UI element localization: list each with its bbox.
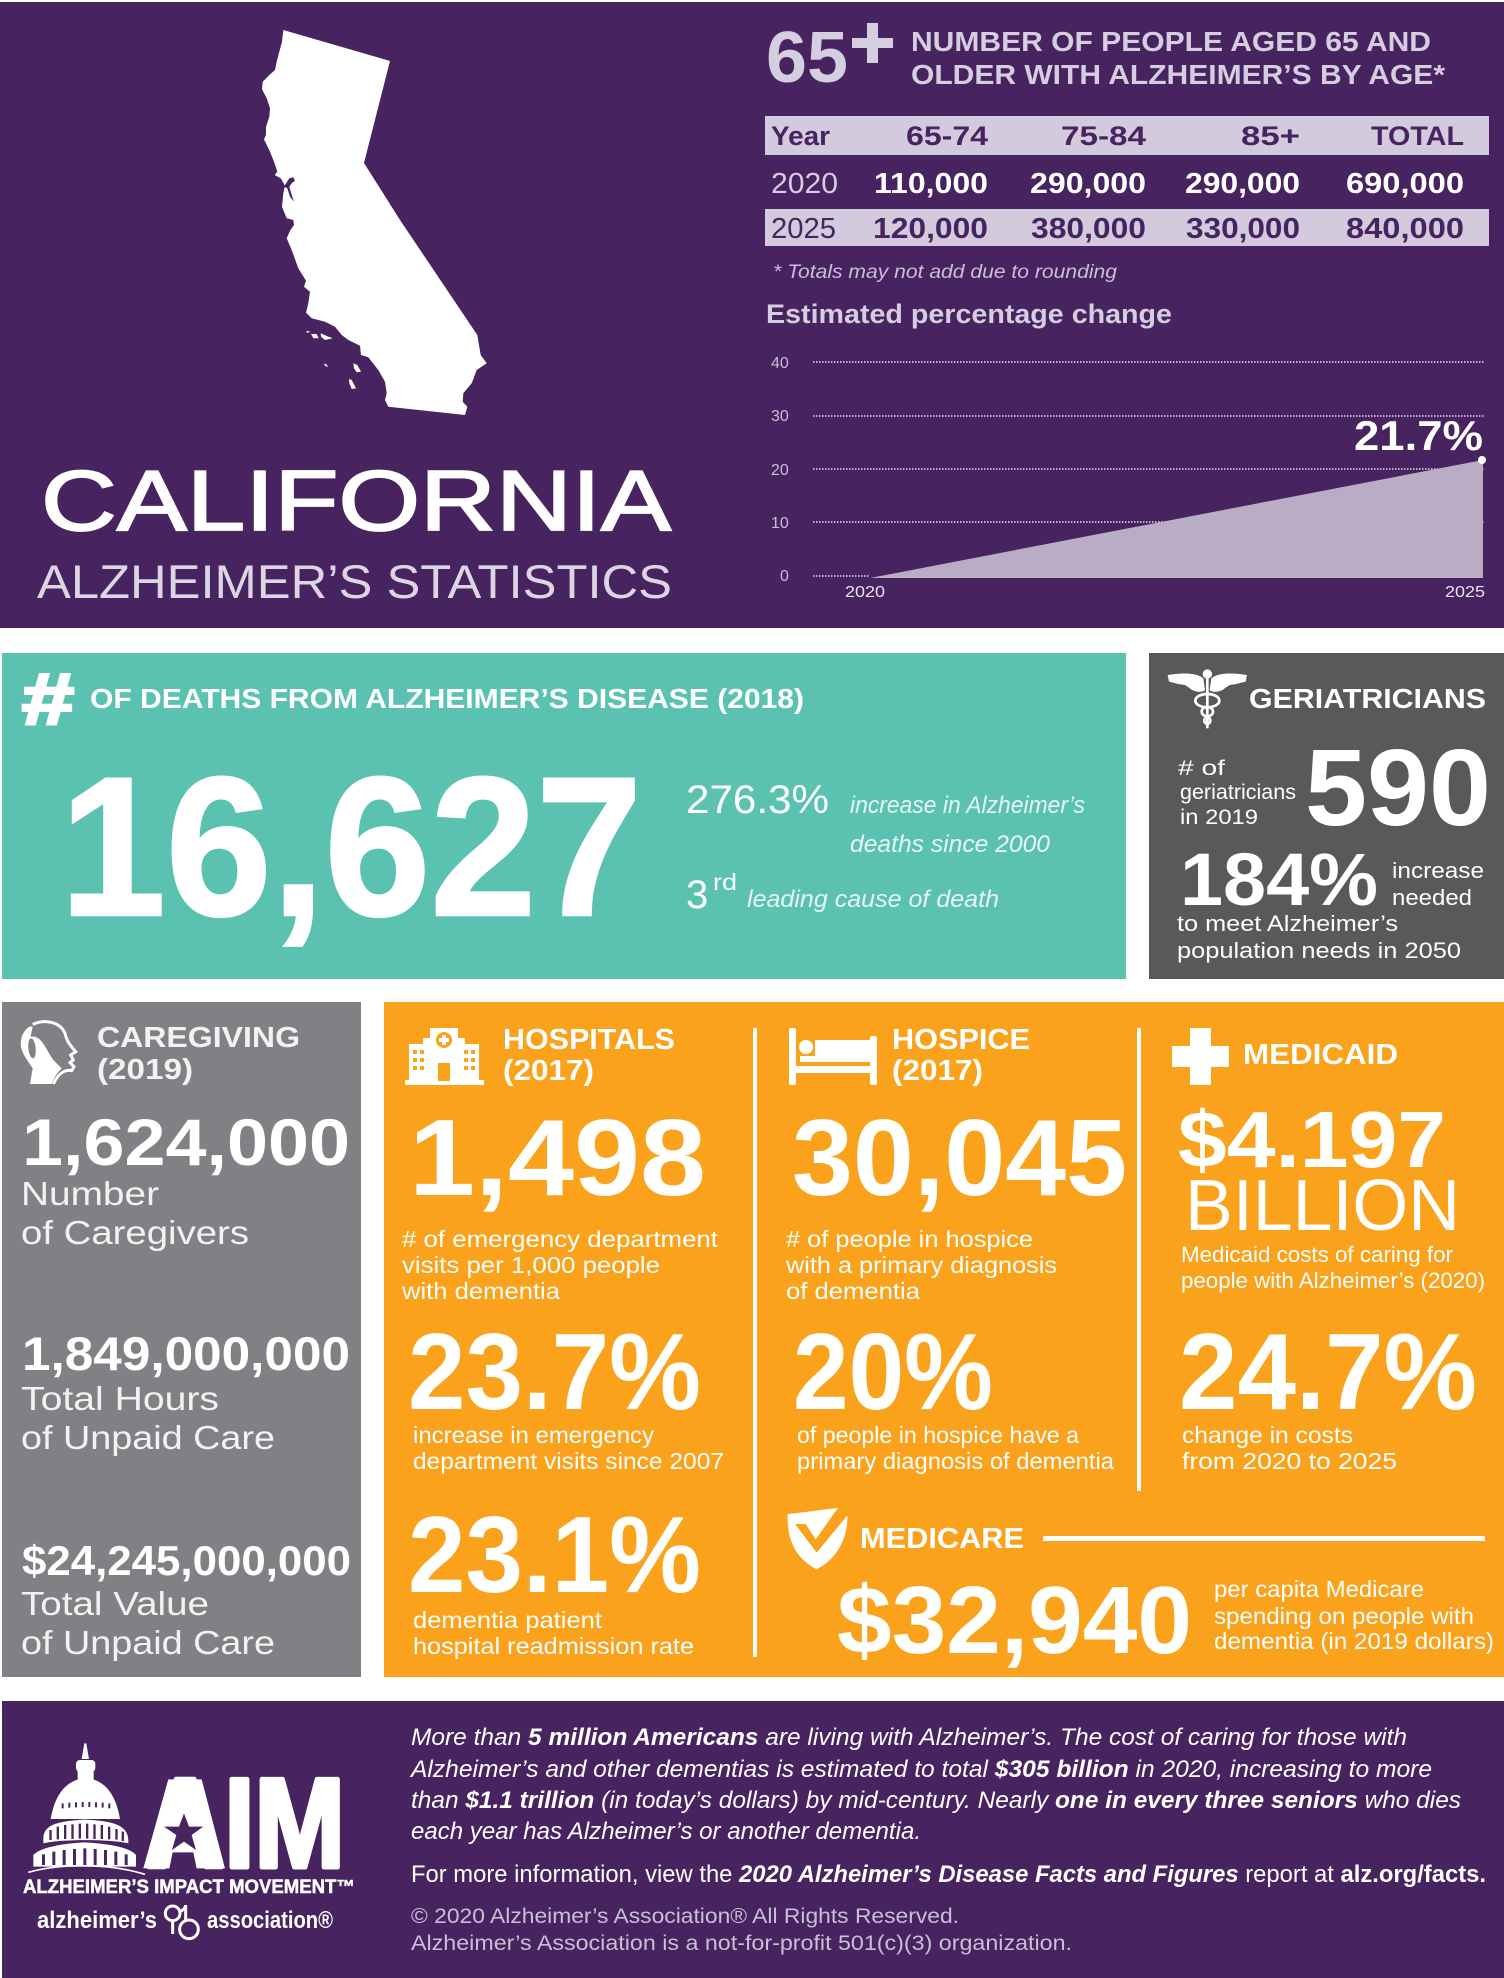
stat: per capita medicare spending xyxy=(837,1567,1494,1674)
area chart: estimated percentage change xyxy=(771,355,1486,601)
table: people with Alzheimer's by age: TOTAL xyxy=(1371,121,1464,151)
heading: number of deaths: OF DEATHS FROM ALZHEIMER’S DISEASE (2018) xyxy=(90,683,804,714)
heading: hospitals 2017: (2017) xyxy=(503,1055,594,1087)
stat: 184% increase needed: population needs in 2050 xyxy=(1177,938,1461,963)
stat: change in costs: change in costs xyxy=(1182,1422,1353,1448)
heading: hospitals 2017: HOSPITALS xyxy=(503,1024,675,1056)
stat: change in costs: 24.7% xyxy=(1179,1311,1477,1433)
heading: medicaid: MEDICAID xyxy=(1243,1039,1398,1071)
stat: readmission rate: 23.1% xyxy=(408,1494,701,1616)
stat: third leading cause xyxy=(686,869,999,917)
table: people with Alzheimer's by age: 2020 xyxy=(771,168,838,200)
stat: per capita medicare spending: per capita Medicare xyxy=(1214,1576,1424,1602)
stat: third leading cause: rd xyxy=(713,869,737,895)
stat: 184% increase needed: needed xyxy=(1392,885,1472,910)
area chart: estimated percentage change: 30 xyxy=(771,408,789,425)
heading: number of people aged 65 and older: OLDER WITH ALZHEIMER’S BY AGE* xyxy=(911,59,1445,90)
table: people with Alzheimer's by age: 120,000 xyxy=(873,213,988,245)
stat: number of caregivers: 1,624,000 xyxy=(22,1105,350,1179)
area chart: estimated percentage change: 2020 xyxy=(845,584,885,601)
table: people with Alzheimer's by age: 2025 xyxy=(771,213,836,245)
heading: hospice 2017: (2017) xyxy=(892,1055,983,1087)
stat: 276.3% increase xyxy=(686,778,1085,858)
icon: medical cross xyxy=(1172,1028,1229,1085)
text block: copyright: © 2020 Alzheimer’s Association® All Rights Reserved. xyxy=(411,1905,959,1928)
table: people with Alzheimer's by age xyxy=(765,116,1489,246)
text block: overview xyxy=(409,1724,1461,1845)
section: hospice xyxy=(785,1024,1127,1474)
table: people with Alzheimer's by age: 330,000 xyxy=(1186,213,1300,245)
label: number of geriatricians in 2019: geriatricians xyxy=(1180,781,1296,804)
icon: head and hand xyxy=(21,1022,76,1084)
table: people with Alzheimer's by age: 65-74 xyxy=(906,121,988,151)
icon: capitol dome xyxy=(28,1743,145,1874)
table: people with Alzheimer's by age: 110,000 xyxy=(874,168,988,200)
stat: medicaid costs: BILLION xyxy=(1185,1166,1460,1246)
area chart: estimated percentage change: 21.7% xyxy=(1354,412,1483,459)
stat: emergency department visits xyxy=(401,1097,719,1304)
label: number of geriatricians in 2019: # of xyxy=(1178,757,1225,780)
stat: third leading cause: leading cause of death xyxy=(747,886,999,913)
stat: people in hospice xyxy=(785,1097,1127,1304)
heading: hospice 2017: HOSPICE xyxy=(892,1024,1030,1056)
stat: total value of unpaid care: Total Value xyxy=(21,1585,209,1622)
stat: emergency department visits: with dementia xyxy=(401,1278,560,1304)
stat: total hours of unpaid care: 1,849,000,000 xyxy=(22,1327,350,1380)
text block: overview: each year has Alzheimer’s or another dementia. xyxy=(411,1818,921,1845)
text block: overview: than $1.1 trillion (in today’s dollars) by mid-century. Nearly one in every three seniors who dies xyxy=(411,1787,1461,1814)
table: people with Alzheimer's by age: 290,000 xyxy=(1030,168,1146,200)
big number: 590: 590 xyxy=(1305,727,1491,849)
table: people with Alzheimer's by age: Year xyxy=(771,121,831,151)
stat: 20% in hospice xyxy=(793,1311,1114,1474)
stat: 20% in hospice: 20% xyxy=(793,1311,993,1433)
text block: overview: Alzheimer’s and other dementias is estimated to total $305 billion in 2020, increasing to more xyxy=(409,1756,1432,1783)
stat: per capita medicare spending: $32,940 xyxy=(837,1567,1192,1674)
stat: 184% increase needed: to meet Alzheimer’s xyxy=(1177,911,1398,936)
stat: number of caregivers xyxy=(21,1105,350,1251)
stat: total hours of unpaid care xyxy=(21,1327,350,1456)
stat: medicaid costs: $4.197 xyxy=(1178,1095,1446,1184)
stat: total hours of unpaid care: Total Hours xyxy=(21,1380,219,1417)
stat: increase in ED visits: 23.7% xyxy=(408,1311,701,1433)
panel: geriatricians xyxy=(1149,653,1504,979)
footnote: totals rounding: * Totals may not add due to rounding xyxy=(773,262,1117,283)
stat: increase in ED visits: increase in emergency xyxy=(413,1422,655,1448)
stat: change in costs: from 2020 to 2025 xyxy=(1182,1448,1397,1474)
panel: deaths from Alzheimer's disease xyxy=(2,653,1126,979)
panel: caregiving xyxy=(2,1002,361,1677)
stat: emergency department visits: visits per 1,000 people xyxy=(402,1252,660,1278)
stat: people in hospice: 30,045 xyxy=(792,1097,1127,1219)
stat: 20% in hospice: of people in hospice have a xyxy=(797,1422,1079,1448)
table: people with Alzheimer's by age: 75-84 xyxy=(1061,121,1146,151)
stat: 276.3% increase: 276.3% xyxy=(686,778,829,822)
big number: deaths: 16,627 xyxy=(60,736,642,957)
icon: caduceus xyxy=(1168,669,1247,728)
heading: caregiving 2019 xyxy=(97,1022,300,1086)
label: number of geriatricians in 2019: in 2019 xyxy=(1180,806,1258,829)
area chart: estimated percentage change: 40 xyxy=(771,355,789,372)
label: number of geriatricians in 2019 xyxy=(1178,757,1296,829)
wordmark: Alzheimer's Association: alzheimer’s xyxy=(37,1907,157,1934)
stat: increase in ED visits: department visits since 2007 xyxy=(413,1448,724,1474)
stat: emergency department visits: 1,498 xyxy=(409,1097,706,1219)
stat: medicaid costs: Medicaid costs of caring for xyxy=(1181,1242,1453,1267)
stat: total value of unpaid care xyxy=(21,1537,351,1661)
stat: 184% increase needed: increase xyxy=(1392,858,1484,883)
section: medicare xyxy=(788,1507,1494,1674)
stat: 184% increase needed: 184% xyxy=(1180,838,1378,921)
stat: per capita medicare spending: spending on people with xyxy=(1214,1603,1474,1629)
heading: 65+ number xyxy=(766,18,893,98)
stat: third leading cause: 3 xyxy=(686,873,708,917)
wordmark: Alzheimer's Association: association® xyxy=(207,1907,333,1934)
heading: hospitals 2017 xyxy=(503,1024,675,1087)
title: California: CALIFORNIA xyxy=(41,454,671,549)
icon: bed xyxy=(789,1028,877,1085)
stat: total value of unpaid care: of Unpaid Care xyxy=(21,1624,275,1661)
stat: number of caregivers: Number xyxy=(21,1175,159,1212)
heading: estimated percentage change: Estimated percentage change xyxy=(766,299,1172,329)
stat: medicaid costs: people with Alzheimer’s (2020) xyxy=(1181,1268,1485,1293)
text block: copyright: Alzheimer’s Association is a not-for-profit 501(c)(3) organization. xyxy=(411,1932,1072,1955)
stat: readmission rate: dementia patient xyxy=(413,1607,603,1633)
panel: footer xyxy=(2,1701,1504,1978)
wordmark: AIM: AIM xyxy=(146,1752,345,1894)
table: people with Alzheimer's by age: 690,000 xyxy=(1346,168,1464,200)
stat: total hours of unpaid care: of Unpaid Care xyxy=(21,1419,275,1456)
text block: copyright xyxy=(411,1905,1072,1955)
panel: California header and title xyxy=(0,2,752,628)
wordmark: Alzheimer's Association xyxy=(37,1905,333,1939)
wordmark: Alzheimer's Impact Movement: ALZHEIMER’S IMPACT MOVEMENT™ xyxy=(23,1877,355,1898)
section: hospitals xyxy=(401,1024,724,1659)
table: people with Alzheimer's by age: 840,000 xyxy=(1346,213,1464,245)
heading: geriatricians: GERIATRICIANS xyxy=(1249,683,1486,714)
stat: people in hospice: with a primary diagnosis xyxy=(785,1252,1057,1278)
heading: 65+ number: 65 xyxy=(766,18,848,98)
logo: Alzheimer's Impact Movement xyxy=(23,1743,355,1939)
icon: hospital building xyxy=(405,1028,484,1085)
area chart: estimated percentage change: 0 xyxy=(780,568,789,585)
table: people with Alzheimer's by age: 380,000 xyxy=(1031,213,1146,245)
icon: California state map xyxy=(262,30,487,415)
area chart: estimated percentage change: 2025 xyxy=(1445,584,1485,601)
stat: 184% increase needed xyxy=(1177,838,1484,963)
heading: medicare: MEDICARE xyxy=(860,1523,1024,1555)
panel: age 65+ table and chart xyxy=(752,2,1504,628)
area chart: estimated percentage change: 10 xyxy=(771,515,789,532)
text block: more information: For more information, view the 2020 Alzheimer’s Disease Facts and Figures report at alz.org/facts. xyxy=(411,1861,1486,1888)
section: medicaid xyxy=(1172,1028,1485,1474)
stat: readmission rate: hospital readmission rate xyxy=(413,1633,694,1659)
heading: hospice 2017 xyxy=(892,1024,1030,1087)
table: people with Alzheimer's by age: 290,000 xyxy=(1185,168,1300,200)
stat: people in hospice: of dementia xyxy=(786,1278,920,1304)
icon: shield with check xyxy=(788,1507,848,1569)
stat: per capita medicare spending: dementia (in 2019 dollars) xyxy=(1214,1628,1494,1654)
area chart: estimated percentage change: 20 xyxy=(771,462,789,479)
heading: number of people aged 65 and older xyxy=(911,26,1445,90)
stat: emergency department visits: # of emergency department xyxy=(402,1226,719,1252)
stat: people in hospice: # of people in hospice xyxy=(786,1226,1033,1252)
stat: total value of unpaid care: $24,245,000,000 xyxy=(22,1537,351,1584)
subtitle: Alzheimer's Statistics: ALZHEIMER’S STATISTICS xyxy=(37,555,672,608)
panel: hospitals, hospice, medicaid, medicare xyxy=(384,1002,1504,1677)
heading: caregiving 2019: (2019) xyxy=(97,1054,193,1086)
stat: 276.3% increase: increase in Alzheimer’s xyxy=(850,792,1085,819)
heading: number of people aged 65 and older: NUMBER OF PEOPLE AGED 65 AND xyxy=(911,26,1431,57)
heading: caregiving 2019: CAREGIVING xyxy=(97,1022,300,1054)
stat: medicaid costs xyxy=(1178,1095,1485,1293)
stat: 276.3% increase: deaths since 2000 xyxy=(850,831,1051,858)
text block: overview: More than 5 million Americans are living with Alzheimer’s. The cost of caring for those with xyxy=(411,1724,1407,1751)
table: people with Alzheimer's by age: 85+ xyxy=(1241,121,1300,151)
stat: number of caregivers: of Caregivers xyxy=(21,1214,249,1251)
icon: hash mark: # xyxy=(22,660,74,740)
stat: 20% in hospice: primary diagnosis of dementia xyxy=(797,1448,1114,1474)
